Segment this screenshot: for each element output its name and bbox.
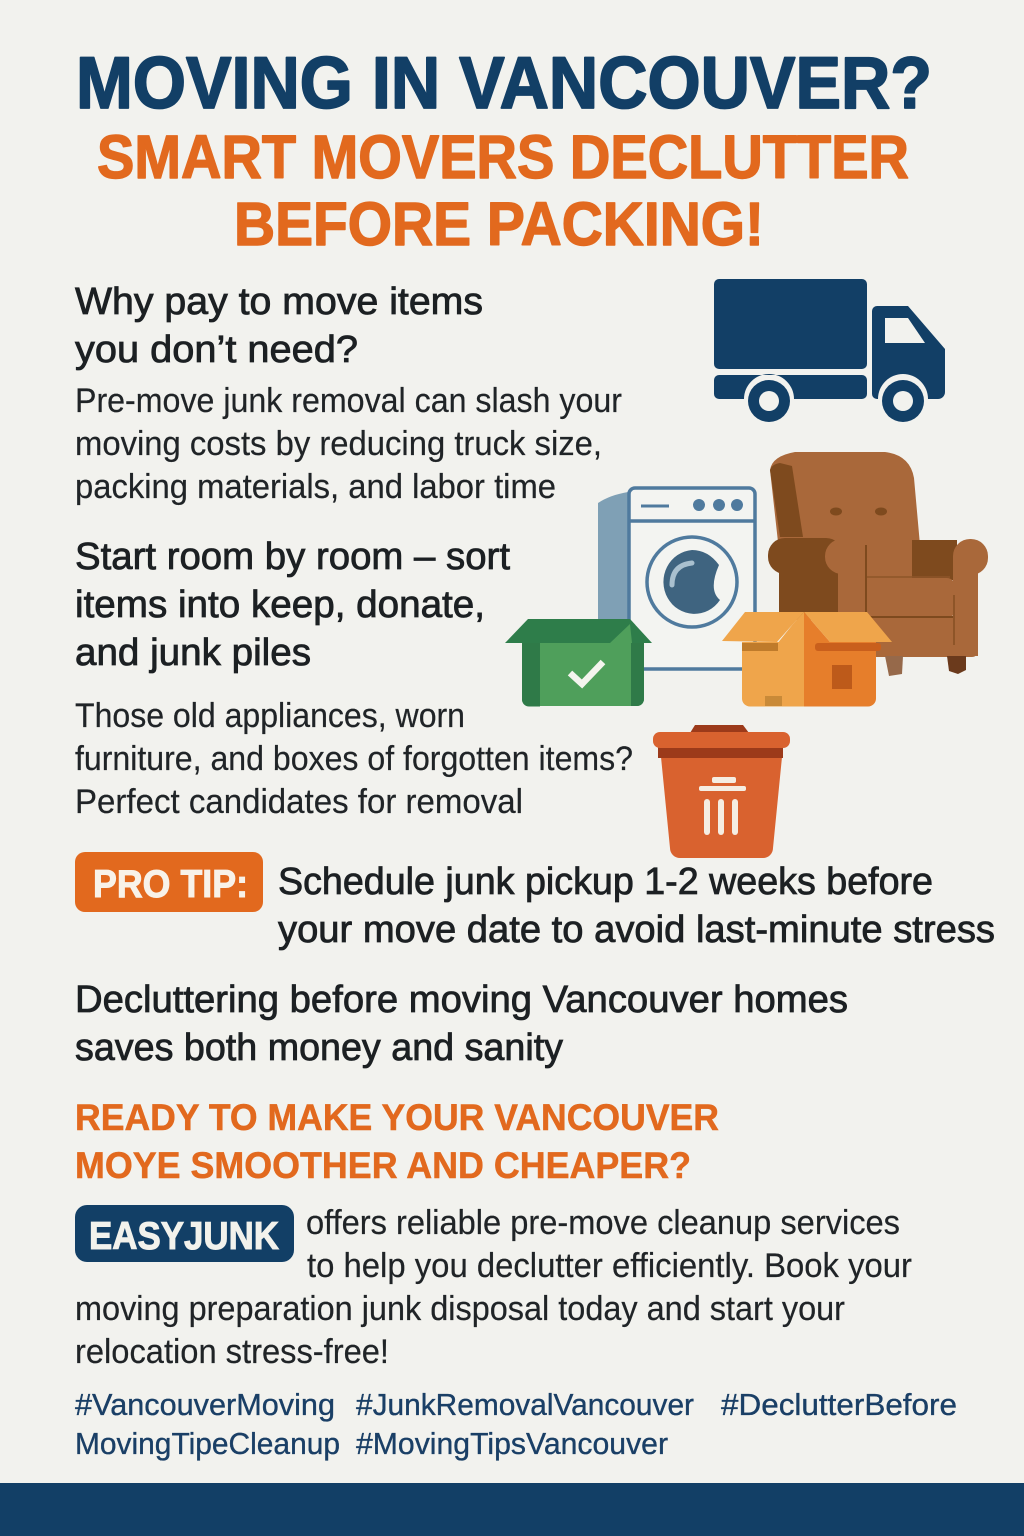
- text: removal candidates: Those old appliances, worn: [75, 697, 465, 735]
- text: EasyJunk offer: relocation stress-free!: [75, 1333, 389, 1371]
- icon: armchair: [768, 452, 988, 676]
- text: EasyJunk offer: to help you declutter efficiently. Book your: [307, 1247, 912, 1285]
- heading: call to action: MOYE SMOOTHER AND CHEAPER?: [75, 1145, 691, 1186]
- text: decluttering saves money: Decluttering before moving Vancouver homes: [75, 979, 848, 1021]
- hashtags: [75, 1387, 957, 1461]
- title: MOVING IN VANCOUVER?: [76, 43, 932, 124]
- text: pro tip: your move date to avoid last-minute stress: [278, 909, 995, 951]
- text: junk removal savings: packing materials, and labor time: [75, 468, 556, 506]
- text: junk removal savings: Pre-move junk removal can slash your: [75, 382, 622, 420]
- footer bar: [0, 1483, 1024, 1536]
- title: [76, 43, 932, 258]
- hashtags: #MovingTipsVancouver: [356, 1426, 668, 1461]
- hashtags: #JunkRemovalVancouver: [356, 1387, 694, 1422]
- text: decluttering saves money: [75, 979, 848, 1069]
- badge: EasyJunk: EASYJUNK: [89, 1215, 279, 1258]
- heading: why pay: [75, 281, 483, 371]
- badge: pro tip: PRO TIP:: [93, 863, 248, 906]
- badge: EasyJunk: [75, 1205, 294, 1262]
- heading: why pay: you don’t need?: [75, 329, 358, 371]
- text: pro tip: Schedule junk pickup 1-2 weeks before: [278, 861, 933, 903]
- icon: orange cardboard box: [722, 612, 892, 706]
- icon: washing machine: [598, 488, 755, 669]
- text: removal candidates: [75, 697, 633, 821]
- text: EasyJunk offer: [75, 1204, 912, 1371]
- badge: pro tip: [75, 852, 263, 912]
- text: EasyJunk offer: moving preparation junk disposal today and start your: [75, 1290, 845, 1328]
- text: junk removal savings: [75, 382, 622, 506]
- heading: room by room: [75, 536, 510, 674]
- text: decluttering saves money: saves both money and sanity: [75, 1027, 563, 1069]
- heading: room by room: items into keep, donate,: [75, 584, 485, 626]
- title: BEFORE PACKING!: [234, 190, 764, 258]
- heading: call to action: READY TO MAKE YOUR VANCOUVER: [75, 1097, 719, 1138]
- heading: room by room: and junk piles: [75, 632, 311, 674]
- text: EasyJunk offer: offers reliable pre-move cleanup services: [306, 1204, 900, 1242]
- hashtags: MovingTipeCleanup: [75, 1426, 340, 1461]
- title: SMART MOVERS DECLUTTER: [97, 123, 909, 191]
- icon: delivery truck: [714, 279, 945, 422]
- heading: why pay: Why pay to move items: [75, 281, 483, 323]
- text: pro tip: [278, 861, 995, 951]
- icon: green box with check: [505, 619, 652, 706]
- text: junk removal savings: moving costs by reducing truck size,: [75, 425, 602, 463]
- icon: red trash bin: [653, 725, 790, 858]
- hashtags: #DeclutterBefore: [721, 1387, 957, 1422]
- text: removal candidates: furniture, and boxes of forgotten items?: [75, 740, 633, 778]
- heading: call to action: [75, 1097, 719, 1186]
- hashtags: #VancouverMoving: [75, 1387, 335, 1422]
- heading: room by room: Start room by room – sort: [75, 536, 510, 578]
- text: removal candidates: Perfect candidates for removal: [75, 783, 523, 821]
